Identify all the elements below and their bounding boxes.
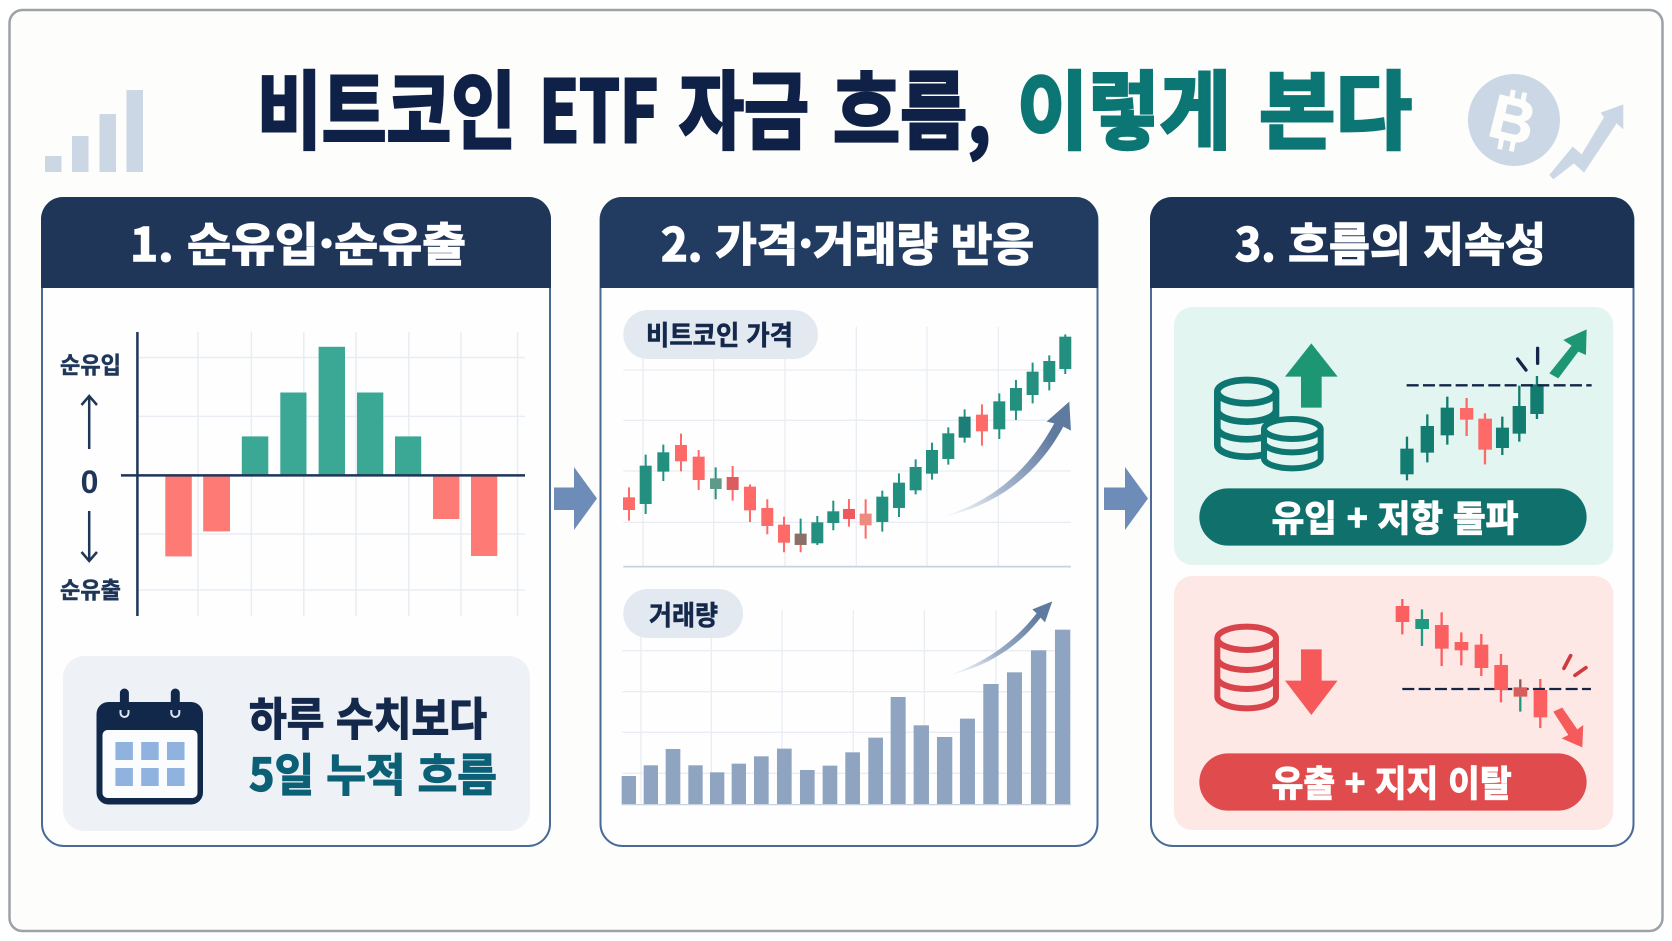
axis label: net inflow: 순유입 (60, 346, 121, 380)
title: 자금 (679, 44, 809, 167)
icon: breakout sparks (1518, 348, 1538, 370)
chart: breakdown candles (1396, 599, 1591, 728)
icon: breakout arrow (1549, 329, 1587, 378)
label: volume: 거래량 (649, 594, 718, 633)
arrow: panel 2 to 3 (1104, 467, 1148, 530)
label: inflow plus resistance breakout (1199, 488, 1587, 546)
heading 3: 3. 흐름의 지속성 (1235, 209, 1546, 275)
chart: breakout candles (1400, 376, 1592, 480)
icon: breakdown sparks (1564, 656, 1586, 675)
callout: five-day cumulative flow (63, 656, 530, 831)
axis label: zero: 0 (81, 464, 98, 500)
arrow: price trend (943, 402, 1071, 517)
icon: down arrow (1285, 649, 1338, 715)
heading 2: 2. 가격·거래량 반응 (661, 209, 1034, 275)
label: volume (623, 589, 743, 638)
icon: calendar (96, 693, 203, 804)
label: outflow plus support breakdown: 유출 + 지지 이탈 (1272, 755, 1512, 807)
panel: flow persistence (1150, 197, 1634, 846)
chart: bitcoin price candles (623, 327, 1071, 567)
panel header 1 (41, 197, 551, 288)
title: 본다 (1259, 44, 1412, 167)
label: inflow plus resistance breakout: 유입 + 저항 돌파 (1272, 490, 1518, 542)
title: 이렇게 (1017, 44, 1231, 167)
icon: bitcoin coin: B (1482, 82, 1542, 159)
chart: daily flow bars (121, 332, 525, 616)
panel header 3 (1150, 197, 1634, 288)
panel: outflow and support breakdown (1174, 576, 1613, 830)
arrow: down (82, 511, 97, 561)
icon: bitcoin coin (1468, 74, 1560, 166)
label: bitcoin price: 비트코인 가격 (646, 314, 793, 353)
title: ETF (539, 44, 658, 167)
heading 1: 1. 순유입·순유출 (130, 209, 466, 275)
panel: inflow and resistance breakout (1174, 307, 1613, 565)
label: bitcoin price (623, 310, 818, 359)
axis label: net outflow: 순유출 (60, 571, 121, 605)
callout text line 1: 하루 수치보다 (249, 683, 487, 748)
icon: coin stack (1217, 627, 1276, 708)
title: 흐름, (833, 44, 991, 167)
panel: price and volume reaction (600, 197, 1098, 846)
panel: net inflow and outflow (41, 197, 551, 846)
icon: breakdown arrow (1553, 708, 1583, 747)
callout text line 2: 5일 누적 흐름 (249, 739, 497, 804)
icon: decorative bar chart (45, 90, 143, 172)
icon: coin stacks (1217, 380, 1321, 468)
title: 비트코인 (257, 44, 516, 167)
chart: trading volume bars (622, 601, 1071, 805)
arrow: panel 1 to 2 (554, 467, 597, 530)
icon: rising arrow (1549, 104, 1623, 179)
panel header 2 (600, 197, 1098, 288)
arrow: up (82, 396, 97, 449)
icon: up arrow (1285, 343, 1338, 408)
label: outflow plus support breakdown (1199, 753, 1587, 811)
arrow: volume trend (948, 601, 1052, 675)
